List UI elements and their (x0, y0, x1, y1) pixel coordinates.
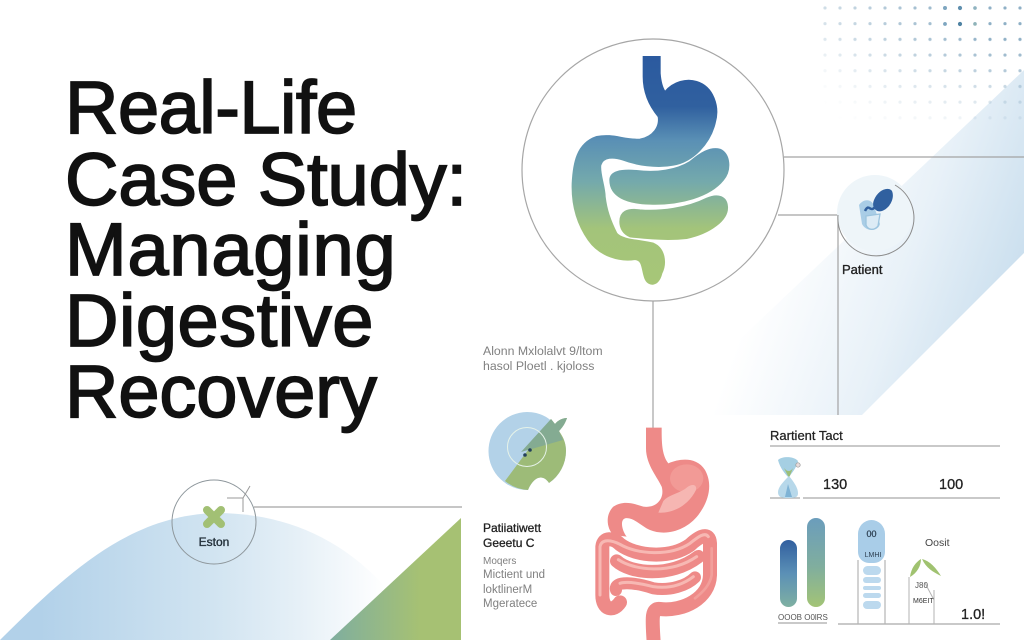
title: Case Study: (65, 138, 467, 221)
icon: pink digestive system (600, 428, 712, 640)
icon: patient circle (837, 175, 914, 256)
bottom-left hill (0, 513, 425, 640)
bar chart (778, 518, 828, 622)
value: 130: 130 (823, 477, 847, 493)
pill column chart: 00 (866, 529, 877, 539)
icon: large gradient digestive system in circle (522, 39, 784, 301)
title: Digestive (65, 279, 374, 362)
heading: patient tact: Rartient Tact (770, 428, 843, 443)
caption text: Alonn Mxlolalvt 9/ltom (483, 344, 603, 358)
background band: diagonal blue gradient (660, 70, 1024, 415)
text block: patient details: Geeetu C (483, 536, 535, 550)
title: Real-Life (65, 66, 357, 149)
title: Recovery (65, 350, 377, 433)
pill column chart (858, 520, 885, 624)
dot grid (823, 6, 1022, 120)
value: 100: 100 (939, 477, 963, 493)
text block: patient details: Patiiatiwett (483, 521, 542, 535)
bar chart: OOOB O0lRS (778, 613, 828, 622)
caption text: hasol Ploetl . kjoloss (483, 359, 594, 373)
text block: patient details: Mgeratece (483, 598, 537, 610)
text block: patient details: Mictient und (483, 569, 545, 581)
leaf column chart: M6EIT (913, 598, 934, 605)
green triangle (330, 518, 461, 640)
icon: Eston badge (172, 480, 256, 564)
leaf column chart (909, 559, 941, 624)
connector lines (254, 157, 1024, 507)
icon: blue and green pie (488, 412, 567, 490)
icon: Eston badge: Eston (199, 535, 229, 549)
leaf column chart: J80 (915, 581, 928, 590)
label: patient: Patient (842, 262, 883, 277)
table divider lines (770, 446, 1000, 624)
value: 1.0: 1.0! (961, 607, 985, 623)
text block: patient details: loktlinerM (483, 584, 532, 596)
pill column chart: LMHI (865, 552, 881, 559)
title: Managing (65, 208, 396, 291)
text block: patient details: Moqers (483, 556, 516, 567)
text block: patient details (483, 521, 548, 610)
label: cost: Oosit (925, 537, 950, 549)
icon: small patient figure (778, 457, 800, 498)
